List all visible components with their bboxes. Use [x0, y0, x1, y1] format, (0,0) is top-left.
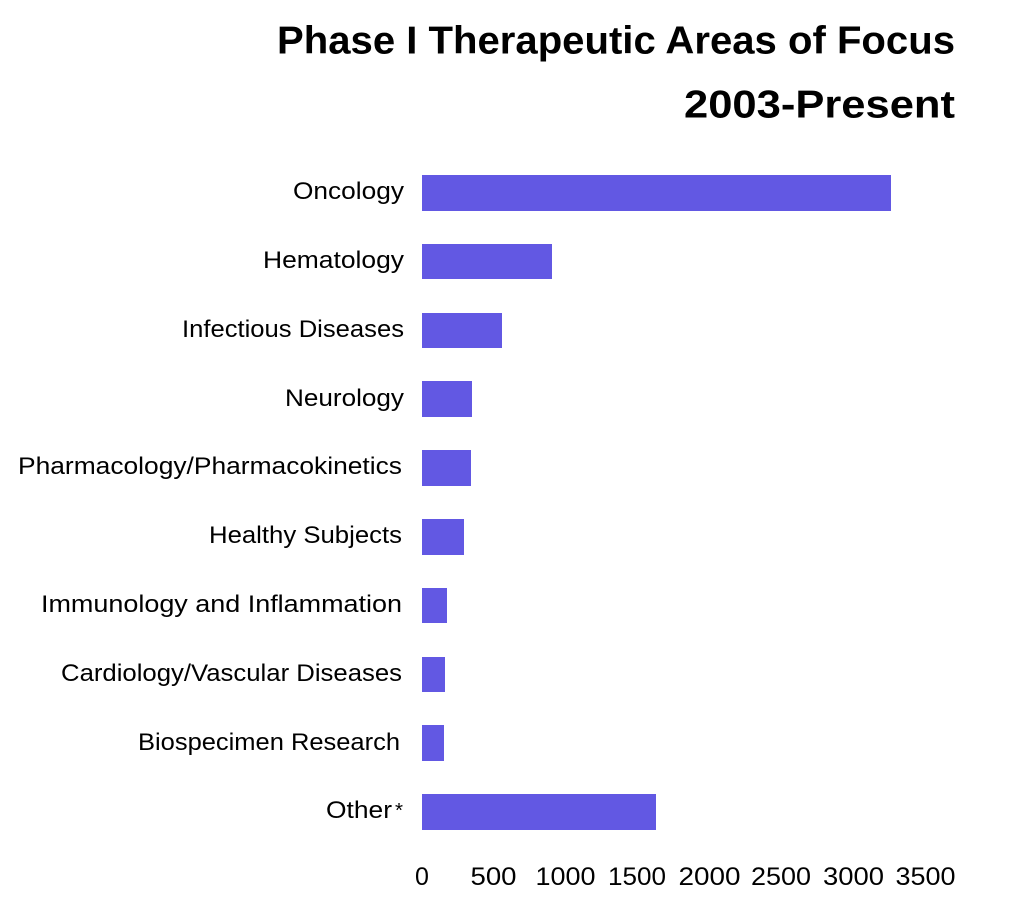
category labels: Infectious Diseases — [182, 316, 404, 343]
x axis labels: 0 — [415, 863, 429, 891]
x axis labels: 3000 — [823, 863, 884, 891]
category labels: Oncology — [293, 178, 404, 205]
x axis labels: 2500 — [751, 863, 811, 891]
x axis labels: 1000 — [536, 863, 596, 891]
category labels: * — [395, 800, 403, 822]
title: Phase I Therapeutic Areas of Focus — [277, 20, 955, 62]
category labels: Other — [326, 797, 392, 824]
category labels: Hematology — [263, 247, 404, 274]
category labels — [18, 178, 404, 824]
category labels: Immunology and Inflammation — [41, 591, 402, 618]
category labels: Biospecimen Research — [138, 729, 400, 756]
category labels: Pharmacology/Pharmacokinetics — [18, 453, 402, 480]
category labels: Neurology — [285, 385, 404, 412]
x axis labels: 3500 — [896, 863, 956, 891]
bar chart — [422, 175, 891, 830]
x axis labels: 2000 — [678, 863, 740, 891]
category labels: Cardiology/Vascular Diseases — [61, 660, 402, 687]
category labels: Healthy Subjects — [209, 522, 402, 549]
x axis labels: 500 — [470, 863, 516, 891]
title: 2003-Present — [684, 84, 955, 126]
x axis labels: 1500 — [608, 863, 666, 891]
x axis labels — [415, 863, 956, 891]
title — [277, 20, 955, 126]
